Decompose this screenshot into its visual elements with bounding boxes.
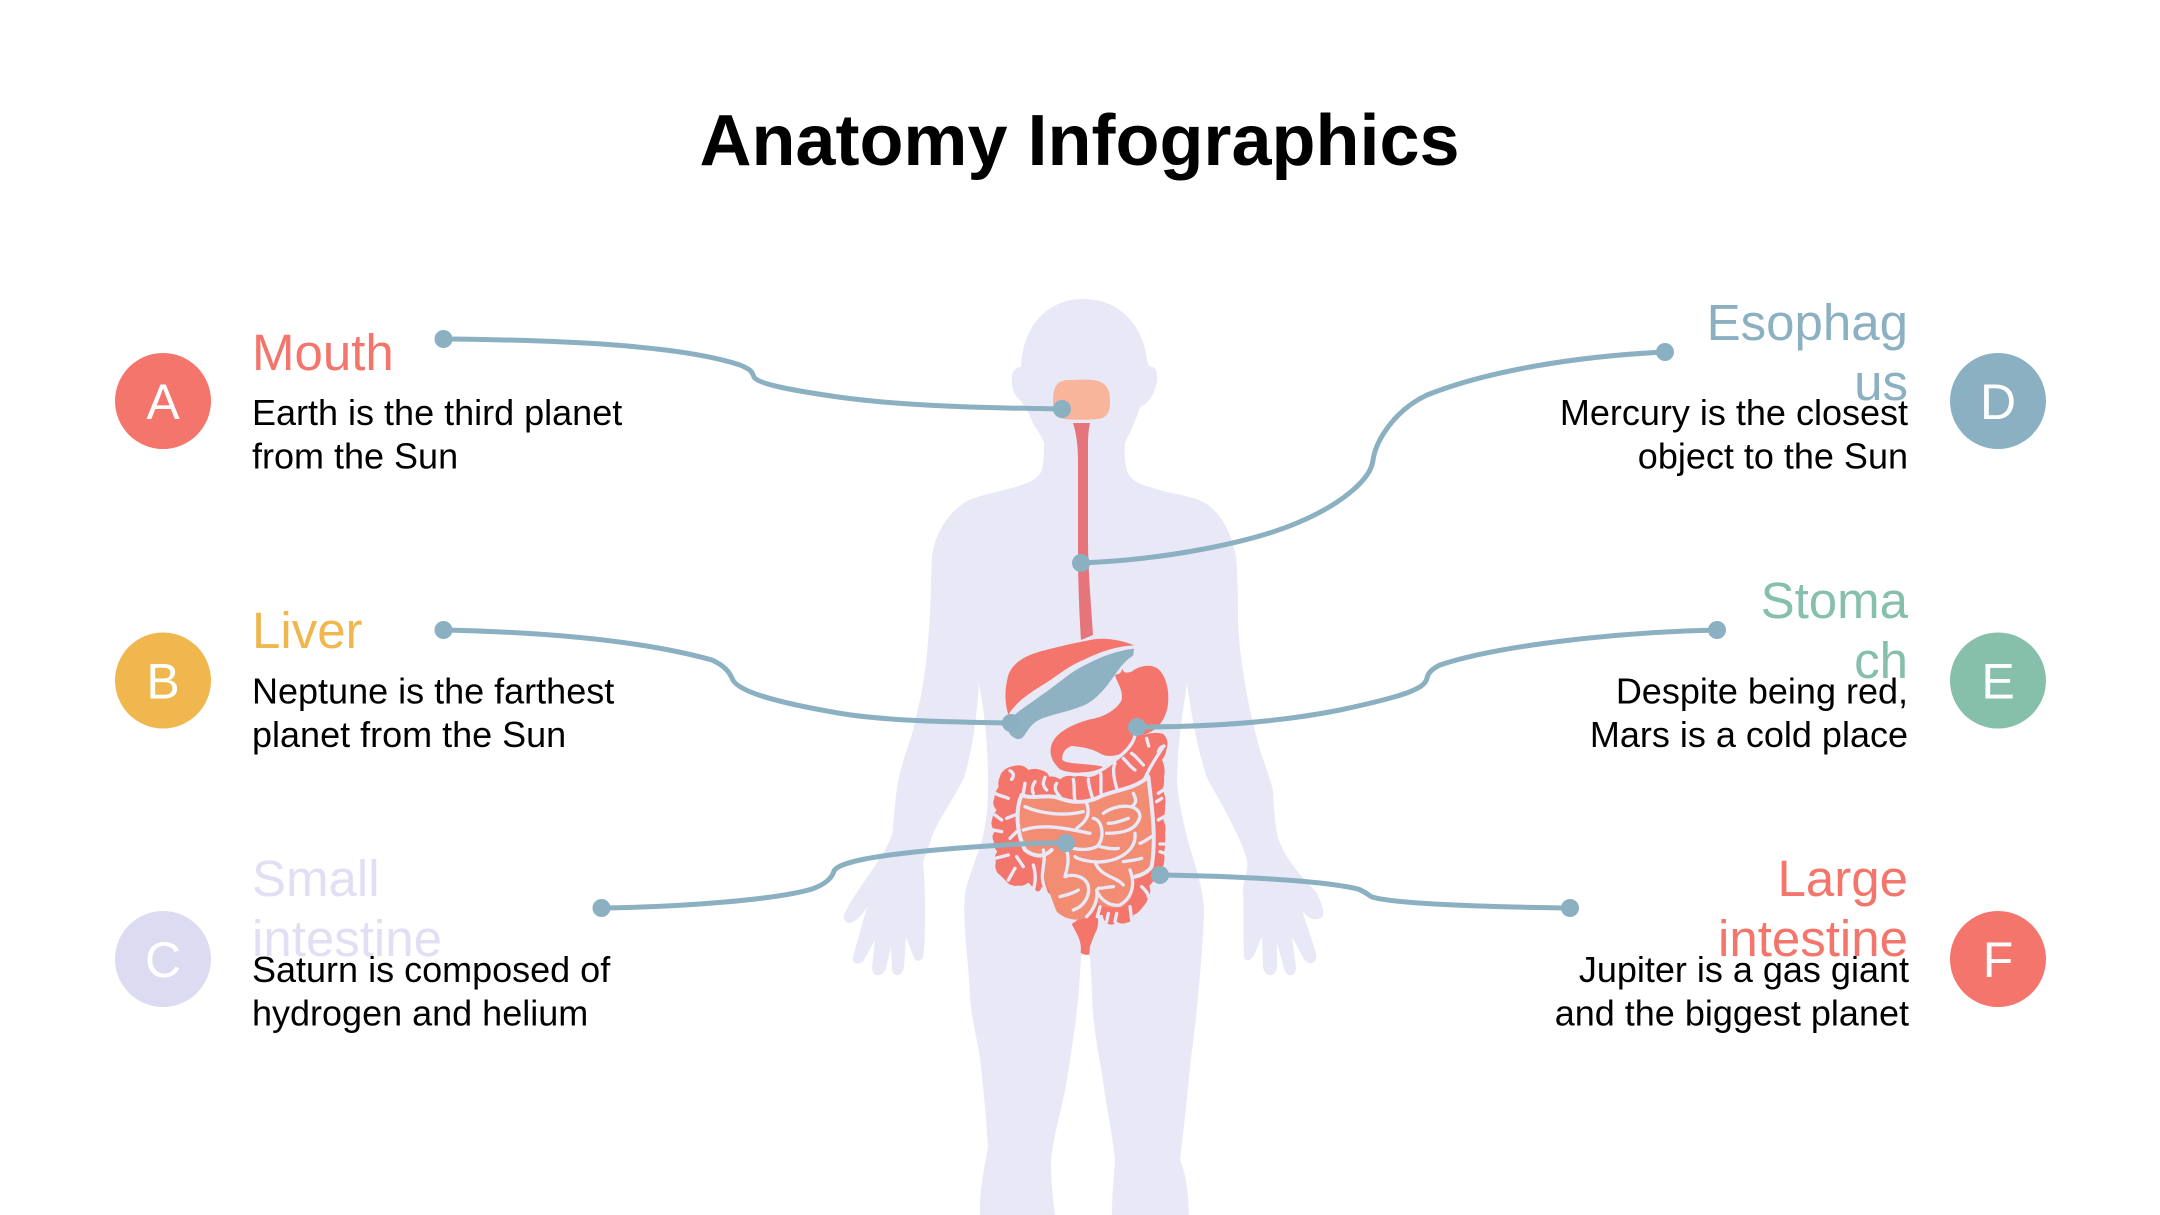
digestive organs: [991, 639, 1168, 955]
organ: pancreas: [1008, 649, 1134, 739]
description D: Mercury is the closest: [1560, 392, 1908, 433]
description A: from the Sun: [252, 436, 458, 476]
heading: Large intestine: intestine: [1718, 910, 1908, 967]
description E: Despite being red,: [1616, 670, 1908, 712]
item D: esophagus: [1560, 294, 2046, 476]
heading: Large intestine: Large: [1778, 850, 1908, 907]
heading: Esophagus: us: [1854, 354, 1908, 411]
organ: stomach: [1051, 666, 1168, 773]
description F: Jupiter is a gas giant: [1579, 949, 1909, 990]
badge D: [1950, 353, 2046, 449]
badge B: B: [146, 654, 180, 710]
item C: small intestine: [115, 850, 611, 1034]
badge A: [115, 353, 211, 449]
connector lines: [443, 339, 1717, 908]
connector: small intestine: [601, 843, 1065, 908]
connector: stomach: [1137, 630, 1717, 727]
connector: liver: [443, 630, 1012, 723]
heading: Liver: Liver: [252, 602, 363, 659]
small intestine folds: [1018, 777, 1154, 917]
item F: large intestine: [1555, 850, 2046, 1034]
heading: Stomach: Stoma: [1761, 572, 1909, 629]
badge B: [115, 632, 211, 728]
badge E: [1950, 632, 2046, 728]
description F: and the biggest planet: [1555, 992, 1909, 1034]
organ: small intestine: [1017, 777, 1154, 920]
badge D: D: [1980, 374, 2016, 430]
badge F: [1950, 911, 2046, 1007]
item E: stomach: [1590, 572, 2046, 755]
description B: Neptune is the farthest: [252, 670, 614, 712]
description E: Mars is a cold place: [1590, 714, 1908, 755]
description C: hydrogen and helium: [252, 992, 588, 1034]
organ: liver: [1005, 639, 1134, 715]
description D: object to the Sun: [1638, 436, 1908, 476]
badge F: F: [1983, 932, 2013, 988]
description B: planet from the Sun: [252, 714, 566, 755]
heading: Esophagus: Esophag: [1707, 294, 1908, 351]
organ: esophagus: [1073, 423, 1093, 640]
large intestine folds: [993, 735, 1165, 922]
description A: Earth is the third planet: [252, 392, 622, 433]
badge E: E: [1981, 654, 2015, 710]
connector: esophagus: [1081, 352, 1665, 563]
heading: Mouth: Mouth: [252, 324, 394, 381]
heading: Small intestine: intestine: [252, 910, 442, 967]
item B: liver: [115, 602, 614, 755]
human body silhouette: [844, 299, 1323, 1215]
connector: mouth: [443, 339, 1062, 409]
organ: mouth: [1053, 380, 1110, 420]
heading: Small intestine: Small: [252, 850, 380, 907]
connector: large intestine: [1160, 875, 1570, 908]
description C: Saturn is composed of: [252, 949, 611, 990]
heading: Stomach: ch: [1854, 632, 1908, 689]
badge C: C: [145, 932, 181, 988]
badge A: A: [146, 374, 180, 430]
organ: large intestine: [991, 733, 1167, 955]
connector end dots: [434, 330, 1726, 917]
badge C: [115, 911, 211, 1007]
title: Anatomy Infographics: [699, 101, 1460, 181]
item A: mouth: [115, 324, 622, 476]
